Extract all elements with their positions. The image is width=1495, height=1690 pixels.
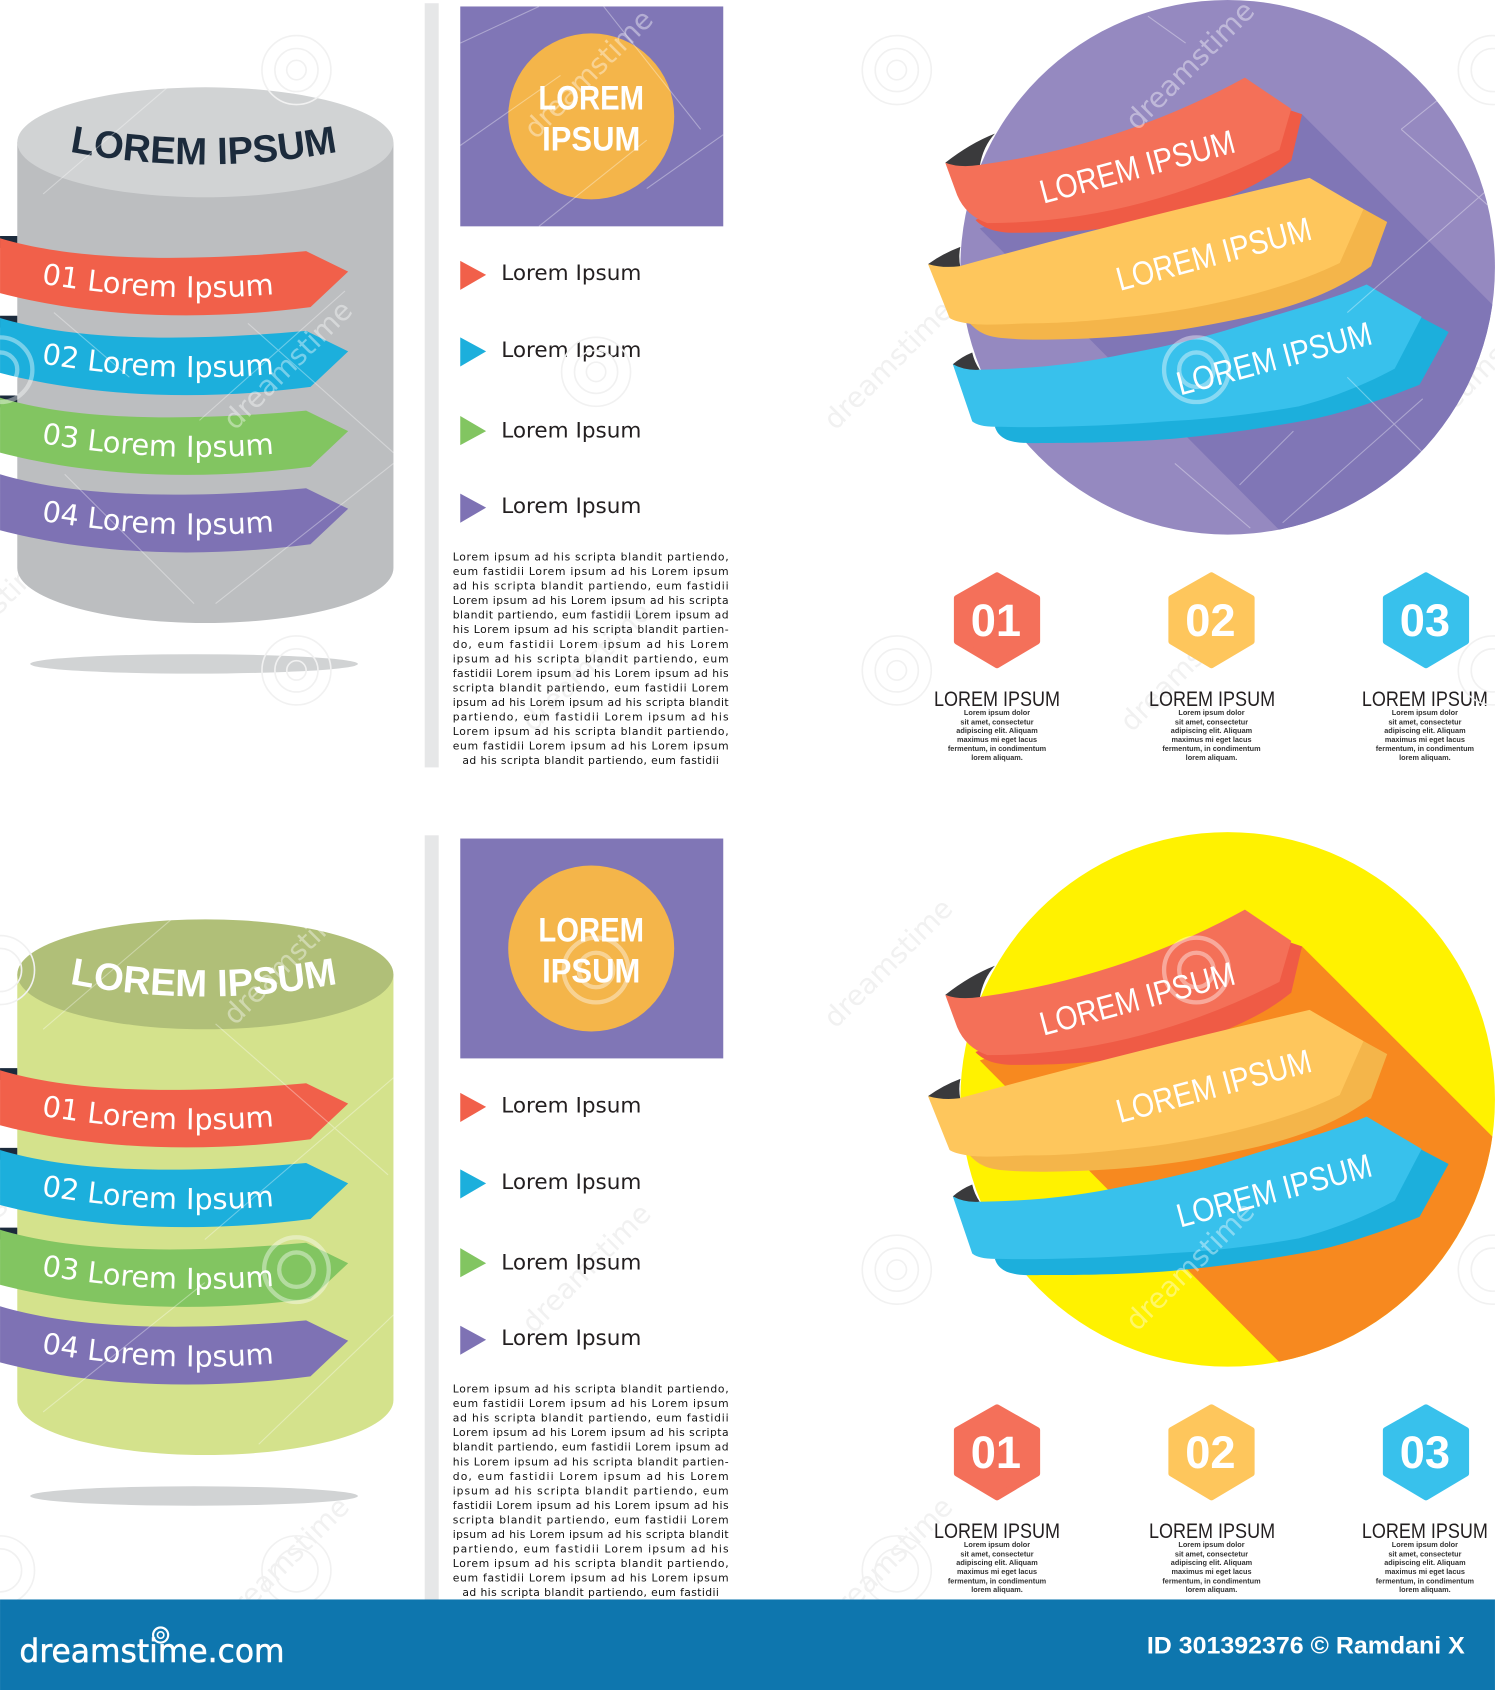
legend item 1: Lorem Ipsum: [501, 261, 641, 286]
step 02 top: sit amet, consectetur: [1175, 717, 1248, 726]
panel: yellow circle ribbons: [928, 832, 1495, 1393]
ribbon 03: 03 Lorem Ipsum: [44, 1255, 272, 1295]
long shadow: [980, 114, 1495, 560]
paragraph bottom: do, eum fastidii Lorem ipsum ad his Lorem: [453, 1470, 729, 1483]
ribbon 02: [0, 318, 348, 396]
step 02 bottom: lorem aliquam.: [1186, 1585, 1237, 1594]
paragraph bottom: [453, 1383, 729, 1599]
ribbon 01: [0, 1070, 348, 1148]
paragraph top: ad his scripta blandit partiendo, eum fastidii: [453, 580, 729, 593]
step 02 top: adipiscing elit. Aliquam: [1171, 726, 1253, 735]
legend item 4: [460, 494, 641, 523]
step 03 bottom: [1362, 1408, 1488, 1594]
step 03 bottom: 03: [1400, 1427, 1450, 1478]
step 01 bottom: [934, 1408, 1060, 1594]
step 02 bottom: [1149, 1408, 1275, 1594]
paragraph top: [453, 550, 729, 767]
paragraph bottom: partiendo, eum fastidii Lorem ipsum ad his: [453, 1543, 729, 1556]
ribbon red: LOREM IPSUM: [1036, 956, 1239, 1043]
watermark overlay: dreamstime: [517, 3, 660, 145]
step 03 top: 03: [1400, 595, 1450, 646]
step 02 bottom: sit amet, consectetur: [1175, 1549, 1248, 1558]
step 03 bottom: lorem aliquam.: [1399, 1585, 1451, 1594]
paragraph top: Lorem ipsum ad his Lorem ipsum ad his scripta: [453, 594, 729, 607]
ribbon tabs: [0, 236, 17, 407]
cylinder top: [17, 919, 393, 1029]
ribbon red: [945, 910, 1302, 1065]
step 03 bottom: maximus mi eget lacus: [1385, 1567, 1465, 1576]
legend item 3: Lorem Ipsum: [501, 419, 641, 444]
background watermark on white: dreamstime: [817, 294, 959, 436]
step 03 bottom: Lorem ipsum dolor: [1392, 1540, 1458, 1549]
panel: purple square badge: LOREM: [538, 79, 644, 117]
step 01 bottom: Lorem ipsum dolor: [964, 1540, 1030, 1549]
step 03 top: lorem aliquam.: [1399, 753, 1451, 762]
paragraph top: his Lorem ipsum ad his scripta blandit partien-: [453, 623, 729, 636]
ribbon yellow: [928, 1010, 1387, 1172]
watermark overlay: dreamstime: [217, 294, 359, 436]
step 02 bottom: Lorem ipsum dolor: [1178, 1540, 1245, 1549]
ribbon yellow: [928, 178, 1387, 340]
paragraph top: Lorem ipsum ad his scripta blandit partiendo,: [453, 550, 729, 563]
step 01 top: fermentum, in condimentum: [948, 744, 1047, 753]
paragraph bottom: ipsum ad his scripta blandit partiendo, eum: [453, 1484, 729, 1497]
ribbon tabs: [0, 1068, 17, 1239]
step 02 bottom: LOREM IPSUM: [1149, 1518, 1275, 1543]
panel: purple square badge: IPSUM: [542, 120, 640, 158]
panel: purple square badge 2: [460, 839, 723, 1058]
step 02 bottom: 02: [1185, 1427, 1236, 1478]
step 03 top: Lorem ipsum dolor: [1392, 708, 1458, 717]
ribbon yellow: LOREM IPSUM: [1112, 1043, 1316, 1131]
paragraph bottom: Lorem ipsum ad his scripta blandit partiendo,: [453, 1557, 729, 1570]
step 03 top: fermentum, in condimentum: [1376, 744, 1475, 753]
paragraph top: blandit partiendo, eum fastidii Lorem ipsum ad: [453, 609, 729, 622]
ribbon red: [945, 78, 1302, 233]
legend item 1: [460, 1093, 641, 1122]
background watermark on white: [0, 294, 1495, 1632]
ribbon 03: [0, 398, 348, 475]
panel: purple circle ribbons: [928, 0, 1495, 560]
step 03 top: sit amet, consectetur: [1388, 717, 1462, 726]
footer credit: ID 301392376 © Ramdani X: [1147, 1633, 1465, 1659]
watermark overlay: dreamstime: [217, 889, 359, 1031]
step 03 bottom: adipiscing elit. Aliquam: [1384, 1558, 1466, 1567]
step 02 bottom: adipiscing elit. Aliquam: [1171, 1558, 1253, 1567]
cylinder shadow: [30, 1486, 358, 1506]
paragraph top: partiendo, eum fastidii Lorem ipsum ad his: [453, 711, 729, 724]
background watermark on white: dreamstime: [817, 1490, 959, 1632]
legend list 2: [460, 1093, 641, 1355]
divider bar top: [425, 3, 439, 767]
background watermark on white: dreamstime: [515, 1197, 657, 1339]
paragraph bottom: ad his scripta blandit partiendo, eum fastidii: [453, 1412, 729, 1425]
legend item 1: [460, 261, 641, 290]
ribbon 01: [0, 238, 348, 316]
ribbon 01: 01 Lorem Ipsum: [44, 1096, 272, 1136]
panel: green cylinder: [0, 919, 394, 1506]
step 01 bottom: 01: [971, 1427, 1021, 1478]
ribbon 03: [0, 1230, 348, 1307]
paragraph bottom: ad his scripta blandit partiendo, eum fastidii: [462, 1586, 719, 1599]
background watermark on white: dreamstime: [1113, 596, 1256, 738]
cylinder top: [17, 87, 393, 197]
paragraph bottom: scripta blandit partiendo, eum fastidii Lorem: [453, 1513, 729, 1526]
paragraph bottom: ipsum ad his Lorem ipsum ad his scripta blandit: [453, 1528, 729, 1541]
paragraph bottom: fastidii Lorem ipsum ad his Lorem ipsum ad his: [453, 1499, 729, 1512]
legend item 3: [460, 416, 641, 445]
step 01 top: LOREM IPSUM: [934, 686, 1060, 711]
step 02 top: 02: [1185, 595, 1236, 646]
paragraph top: ipsum ad his Lorem ipsum ad his scripta blandit: [453, 696, 729, 709]
paragraph bottom: Lorem ipsum ad his scripta blandit partiendo,: [453, 1383, 729, 1396]
legend list: [460, 261, 641, 523]
paragraph top: eum fastidii Lorem ipsum ad his Lorem ipsum: [453, 565, 729, 578]
ribbon 04: 04 Lorem Ipsum: [44, 1333, 272, 1373]
step 02 top: [1149, 576, 1275, 762]
step 03 bottom: sit amet, consectetur: [1388, 1549, 1462, 1558]
step 01 bottom: LOREM IPSUM: [934, 1518, 1060, 1543]
step 01 top: 01: [971, 595, 1021, 646]
legend item 2: Lorem Ipsum: [501, 338, 641, 363]
paragraph bottom: eum fastidii Lorem ipsum ad his Lorem ipsum: [453, 1397, 729, 1410]
legend item 2: Lorem Ipsum: [501, 1170, 641, 1195]
circle background: [960, 0, 1495, 535]
legend item 2: [460, 1169, 641, 1199]
legend item 4: Lorem Ipsum: [501, 494, 641, 519]
step 01 top: maximus mi eget lacus: [957, 735, 1037, 744]
step 03 top: maximus mi eget lacus: [1385, 735, 1465, 744]
step 02 top: Lorem ipsum dolor: [1178, 708, 1245, 717]
step 01 top: [934, 576, 1060, 762]
ribbon 04: [0, 1306, 348, 1384]
background watermark on white: dreamstime: [515, 596, 657, 738]
step 02 bottom: fermentum, in condimentum: [1162, 1576, 1261, 1585]
ribbon yellow: LOREM IPSUM: [1112, 211, 1316, 299]
step 01 top: sit amet, consectetur: [960, 717, 1034, 726]
paragraph top: fastidii Lorem ipsum ad his Lorem ipsum ad his: [453, 667, 729, 680]
paragraph bottom: eum fastidii Lorem ipsum ad his Lorem ipsum: [453, 1572, 729, 1585]
cylinder body: [17, 974, 393, 1455]
ribbon blue: LOREM IPSUM: [1173, 316, 1376, 403]
ribbon 04: [0, 474, 348, 552]
ribbon 03: 03 Lorem Ipsum: [44, 423, 272, 463]
circle background: [960, 832, 1495, 1367]
step 01 bottom: fermentum, in condimentum: [948, 1576, 1047, 1585]
step 03 bottom: fermentum, in condimentum: [1376, 1576, 1475, 1585]
step 02 top: lorem aliquam.: [1186, 753, 1237, 762]
step 03 top: adipiscing elit. Aliquam: [1384, 726, 1466, 735]
paragraph top: scripta blandit partiendo, eum fastidii Lorem: [453, 681, 729, 694]
ribbon blue: LOREM IPSUM: [1173, 1148, 1376, 1235]
paragraph top: ipsum ad his scripta blandit partiendo, eum: [453, 652, 729, 665]
ribbon red: LOREM IPSUM: [1036, 124, 1239, 211]
step 01 bottom: adipiscing elit. Aliquam: [956, 1558, 1038, 1567]
footer logo: dreamstime.com: [19, 1632, 285, 1670]
step 01 bottom: maximus mi eget lacus: [957, 1567, 1037, 1576]
step 01 top: adipiscing elit. Aliquam: [956, 726, 1038, 735]
paragraph top: eum fastidii Lorem ipsum ad his Lorem ipsum: [453, 740, 729, 753]
background watermark on white: dreamstime: [817, 892, 959, 1034]
watermark overlay: dreamstime: [1119, 1195, 1261, 1337]
step 01 top: Lorem ipsum dolor: [964, 708, 1030, 717]
ribbon blue: [953, 285, 1449, 443]
divider bar bottom: [425, 835, 439, 1599]
cylinder title: LOREM IPSUM: [72, 958, 336, 996]
cylinder shadow: [30, 654, 358, 674]
ribbon 04: 04 Lorem Ipsum: [44, 500, 272, 540]
step 02 bottom: maximus mi eget lacus: [1171, 1567, 1252, 1576]
step 01 bottom: lorem aliquam.: [971, 1585, 1023, 1594]
ribbon 02: [0, 1150, 348, 1228]
legend item 3: Lorem Ipsum: [501, 1251, 641, 1276]
step 03 top: [1362, 576, 1488, 762]
ribbon 02: 02 Lorem Ipsum: [44, 344, 272, 384]
panel: purple square badge 2: IPSUM: [542, 952, 640, 990]
paragraph top: do, eum fastidii Lorem ipsum ad his Lorem: [453, 638, 729, 651]
legend item 1: Lorem Ipsum: [501, 1093, 641, 1118]
step 02 top: fermentum, in condimentum: [1162, 744, 1261, 753]
step 02 top: maximus mi eget lacus: [1171, 735, 1252, 744]
ribbon blue: [953, 1117, 1449, 1275]
cylinder body: [17, 142, 393, 623]
footer bar: [0, 1599, 1495, 1690]
background watermark on white: dreamstime: [213, 1490, 356, 1632]
step 01 top: lorem aliquam.: [971, 753, 1023, 762]
legend item 3: [460, 1248, 641, 1277]
paragraph bottom: his Lorem ipsum ad his scripta blandit partien-: [453, 1455, 729, 1468]
legend item 2: [460, 337, 641, 366]
panel: grey cylinder: [0, 87, 394, 674]
paragraph top: ad his scripta blandit partiendo, eum fastidii: [462, 754, 719, 767]
ribbon 02: 02 Lorem Ipsum: [44, 1176, 272, 1216]
step 02 top: LOREM IPSUM: [1149, 686, 1275, 711]
legend item 4: [460, 1326, 641, 1355]
step 01 bottom: sit amet, consectetur: [960, 1549, 1034, 1558]
legend item 4: Lorem Ipsum: [501, 1326, 641, 1351]
paragraph top: Lorem ipsum ad his scripta blandit partiendo,: [453, 725, 729, 738]
cylinder title: LOREM IPSUM: [72, 126, 336, 164]
paragraph bottom: Lorem ipsum ad his Lorem ipsum ad his scripta: [453, 1426, 729, 1439]
panel: purple square badge: [460, 6, 723, 226]
ribbon 01: 01 Lorem Ipsum: [44, 264, 272, 304]
panel: purple square badge 2: LOREM: [538, 911, 644, 949]
long shadow: [980, 946, 1495, 1393]
paragraph bottom: blandit partiendo, eum fastidii Lorem ipsum ad: [453, 1441, 729, 1454]
